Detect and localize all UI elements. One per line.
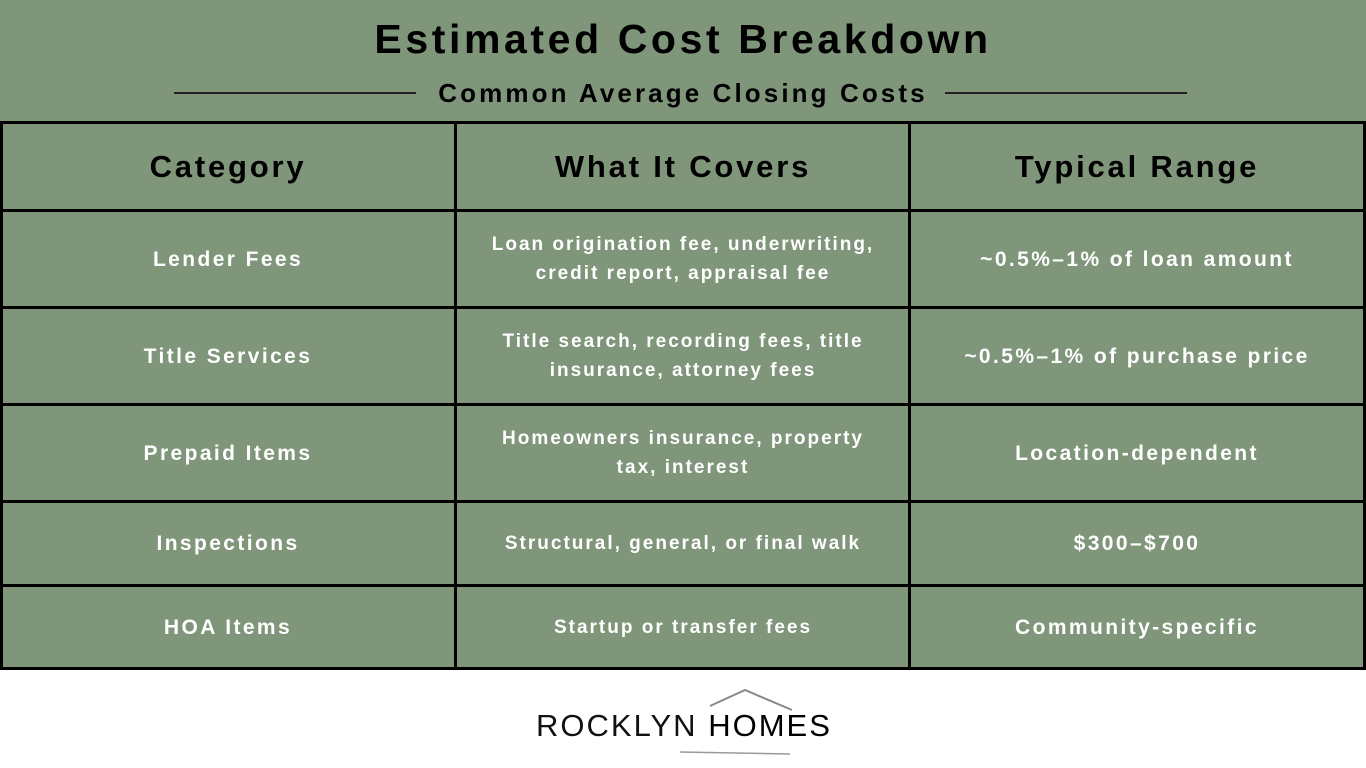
table: $300–$700 (1074, 532, 1200, 555)
row: lender fees: Lender Fees (153, 248, 303, 270)
row: inspections: Inspections (156, 532, 300, 555)
logo (536, 688, 832, 755)
subtitle with rules: Common Average Closing Costs (438, 78, 928, 108)
table: ~0.5%–1% of purchase price (964, 344, 1310, 368)
table: Startup or transfer fees (554, 616, 812, 638)
table: ~0.5%–1% of loan amount (980, 248, 1294, 270)
table: Community-specific (1015, 616, 1259, 638)
table: Location-dependent (1015, 442, 1259, 464)
table: Typical Range (1015, 149, 1259, 184)
table: Loan origination fee, underwriting, (492, 234, 874, 255)
logo: ROCKLYN HOMES (536, 708, 832, 743)
table: Structural, general, or final walk (505, 533, 861, 554)
table: Homeowners insurance, property (502, 428, 864, 449)
row: title services: Title Services (144, 344, 312, 368)
table: Title search, recording fees, title (502, 331, 864, 352)
row: HOA: HOA Items (164, 616, 292, 638)
table: What It Covers (555, 149, 811, 184)
title: Estimated Cost Breakdown (374, 16, 992, 62)
table (0, 121, 1366, 670)
table: insurance, attorney fees (550, 360, 816, 381)
table: tax, interest (617, 457, 749, 478)
row: prepaid: Prepaid Items (144, 442, 312, 464)
table: credit report, appraisal fee (536, 263, 830, 284)
header row: Category (150, 149, 306, 184)
